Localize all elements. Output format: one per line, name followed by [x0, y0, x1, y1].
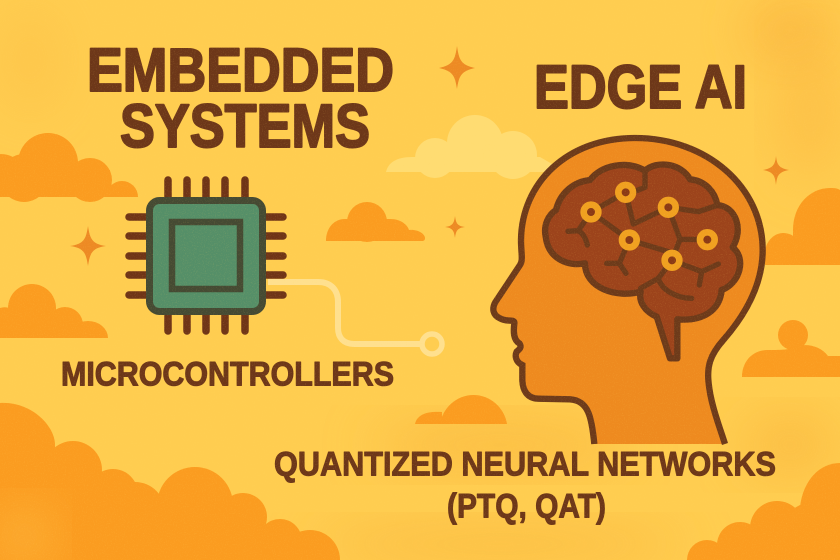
label: quantized neural networks: (PTQ, QAT) — [447, 488, 606, 526]
brain circuit lines — [568, 170, 718, 298]
head with brain — [493, 138, 763, 444]
label: quantized neural networks: QUANTIZED NEURAL NETWORKS — [274, 446, 776, 484]
brain nodes — [584, 185, 715, 268]
title: embedded systems: EMBEDDED — [87, 36, 394, 104]
cloud: right lower — [742, 320, 840, 377]
head silhouette — [493, 138, 763, 444]
chip body — [150, 200, 262, 312]
cloud: center — [326, 202, 425, 242]
brain — [545, 164, 740, 358]
sparkle: small centre — [445, 216, 465, 238]
sparkle: top centre — [439, 46, 475, 89]
title: embedded systems: SYSTEMS — [120, 92, 370, 160]
cloud: bottom right — [687, 463, 840, 560]
icon: microchip — [129, 180, 283, 331]
label: quantized neural networks — [274, 446, 776, 526]
soft fade on bottom-left cloud — [0, 512, 48, 560]
chip core — [172, 222, 240, 289]
connector trace — [268, 282, 442, 354]
cloud: bottom left — [0, 403, 340, 560]
cloud: right upper — [765, 188, 840, 265]
title: embedded systems — [87, 36, 394, 160]
cloud: left middle — [0, 284, 108, 338]
cloud: near neck — [415, 395, 507, 424]
chip pins — [129, 180, 283, 331]
sparkle: left — [70, 226, 106, 266]
label: microcontrollers: MICROCONTROLLERS — [61, 356, 394, 394]
cloud: cream — [386, 115, 566, 179]
title: edge ai: EDGE AI — [534, 53, 747, 121]
sparkle: right — [763, 156, 789, 185]
cloud: top left — [0, 133, 138, 202]
